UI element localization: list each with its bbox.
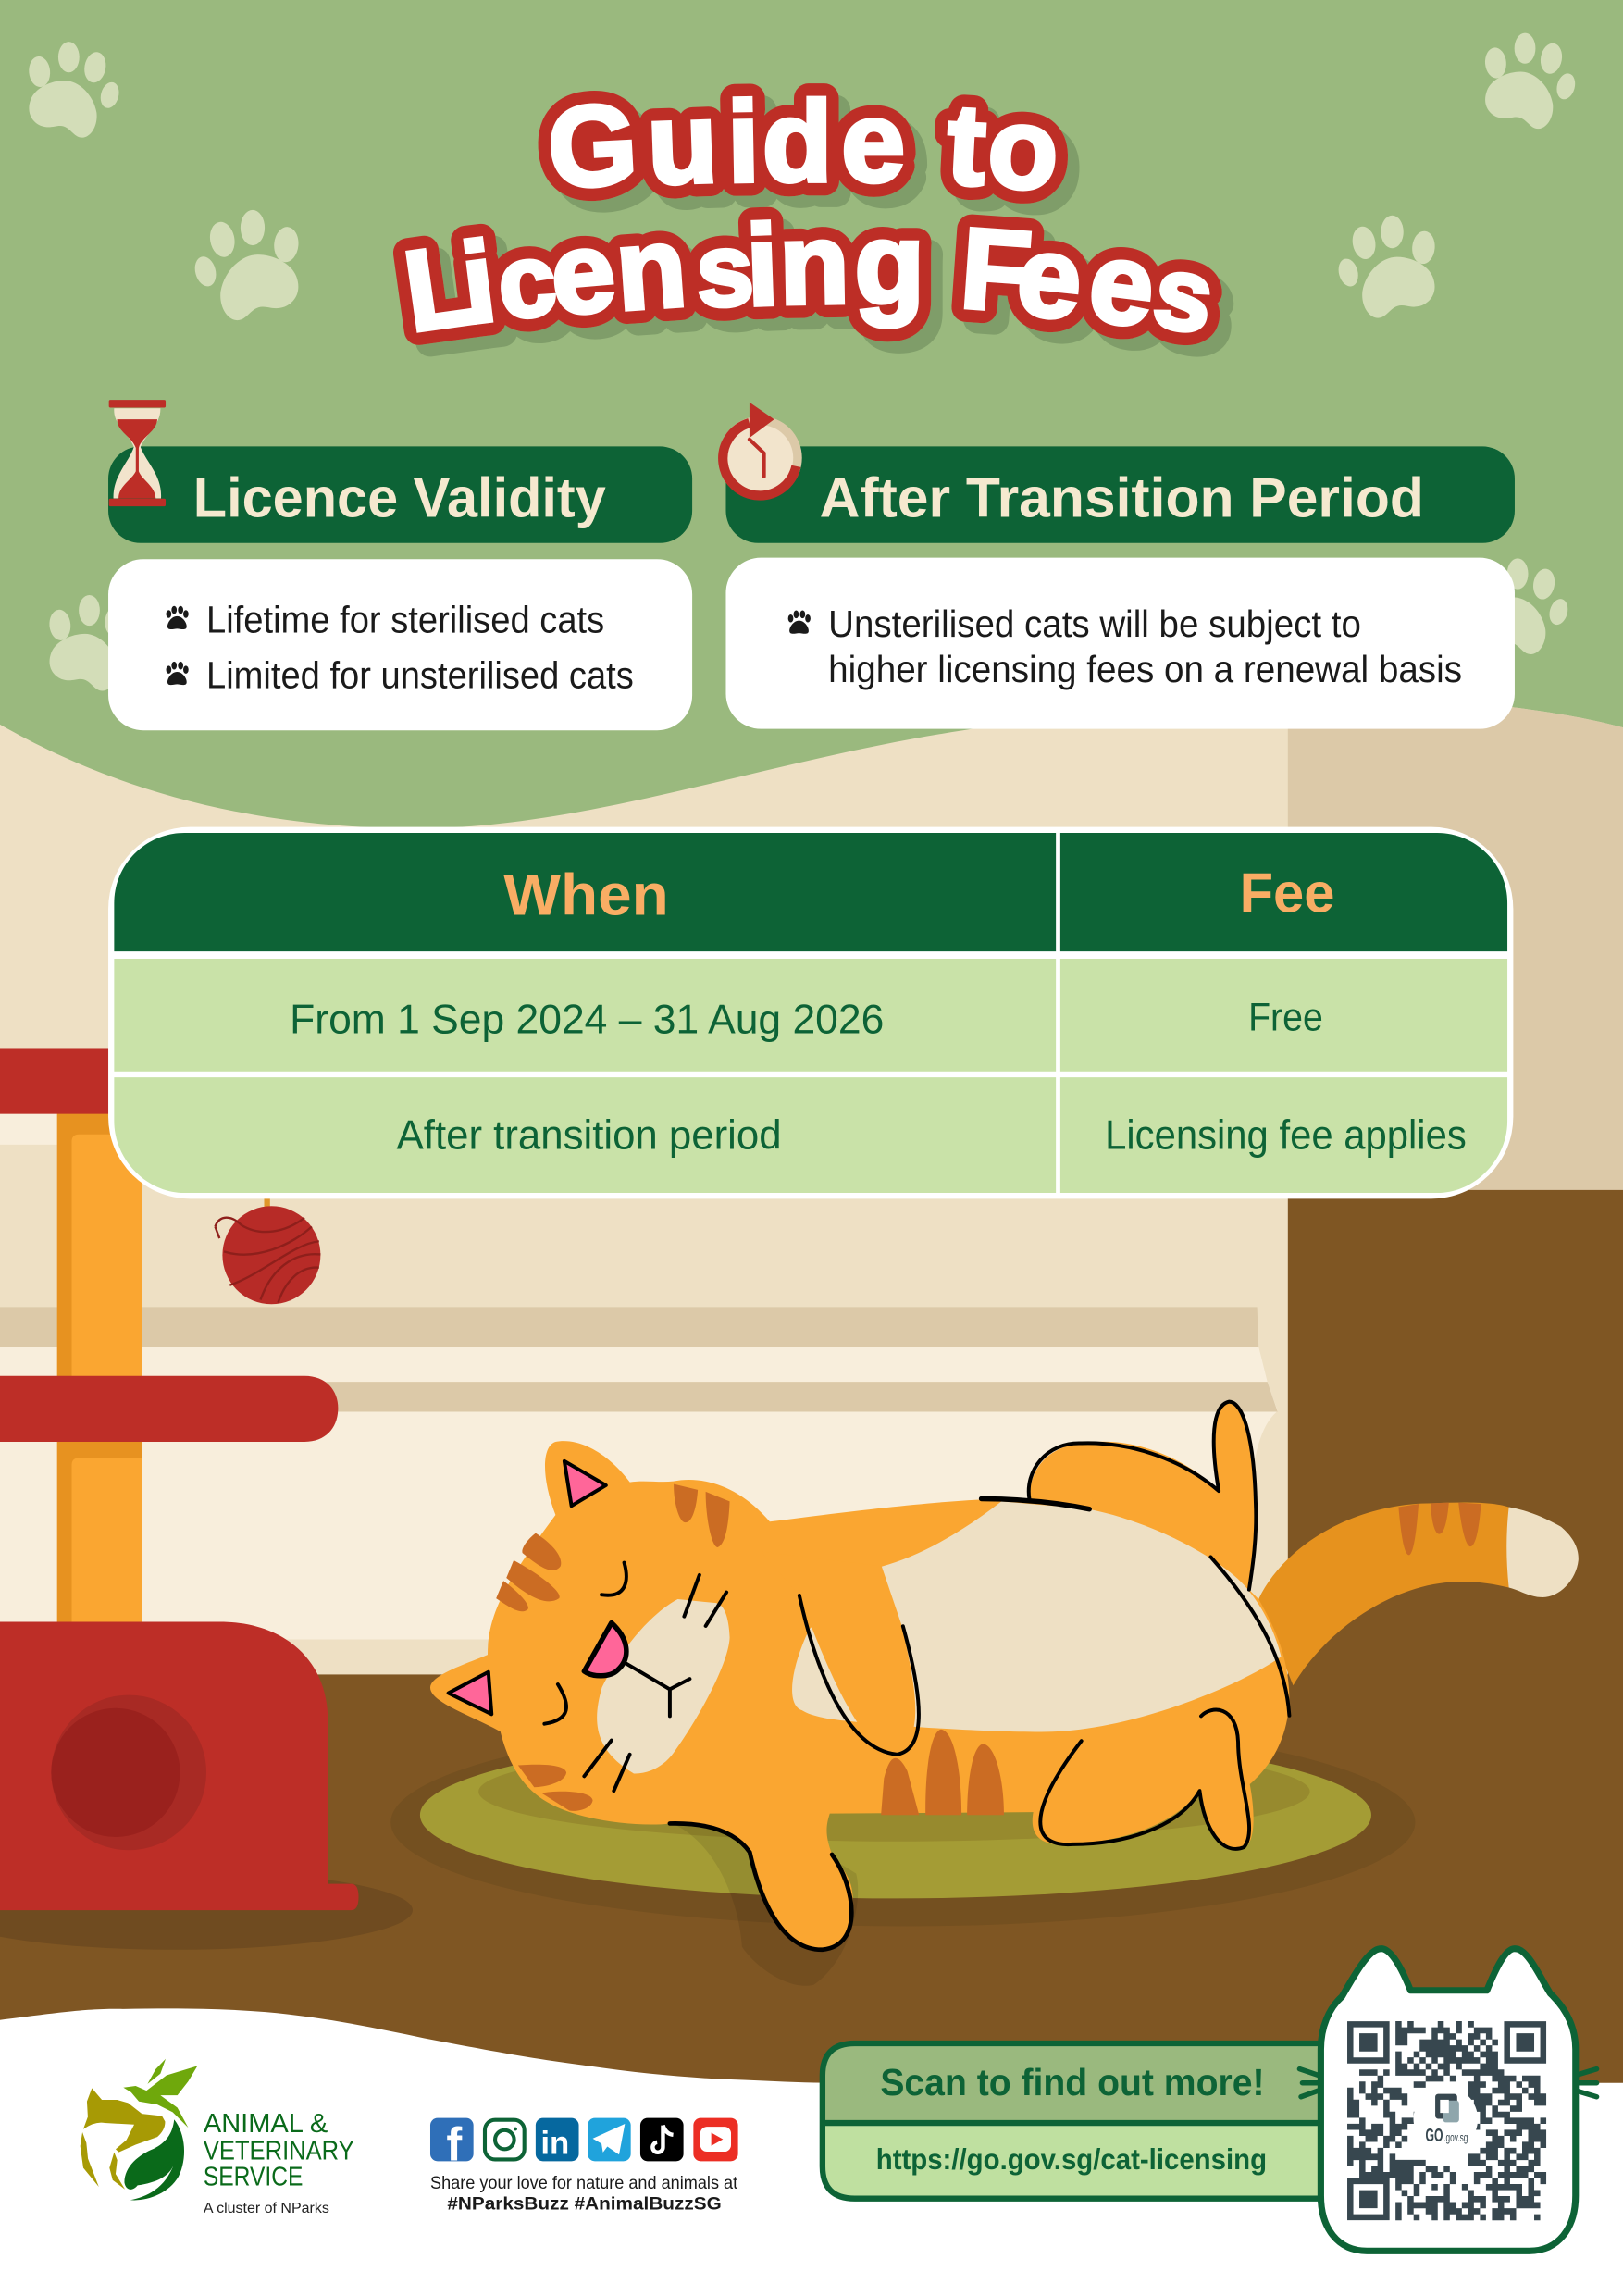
- panel outline: [823, 2043, 1339, 2199]
- yarn ball: [215, 1198, 320, 1304]
- icon: linkedin: in: [540, 2126, 569, 2161]
- QR centre logo: .gov.sg: [1443, 2131, 1468, 2144]
- panel: licence validity header: Licence Validity: [193, 466, 606, 528]
- title white letters: [397, 78, 1220, 356]
- icon: linkedin: [536, 2118, 579, 2161]
- social share text: #NParksBuzz #AnimalBuzzSG: [447, 2194, 722, 2215]
- panel: after transition period text: [725, 558, 1515, 729]
- title: Guide to Licensing Fees: [397, 78, 1220, 356]
- logo: Animal and Veterinary Service: [81, 2059, 354, 2216]
- logo mark: [81, 2059, 197, 2200]
- paw print behind right panel: [1477, 558, 1570, 654]
- panel: after transition period header: After Transition Period: [820, 466, 1424, 528]
- table header: [114, 833, 1507, 951]
- cat whiskers on QR: [1299, 2069, 1597, 2097]
- cat nose: [584, 1623, 626, 1676]
- muzzle: [597, 1599, 730, 1774]
- logo text: ANIMAL &: [204, 2109, 328, 2139]
- table row: after transition: After transition period: [397, 1113, 782, 1159]
- list item: sterilised: Lifetime for sterilised cats: [206, 598, 604, 640]
- logo text: VETERINARY: [204, 2136, 354, 2166]
- QR centre logo: [1414, 2087, 1478, 2152]
- title white letters: Guide to: [545, 78, 1061, 215]
- icon: tiktok: [640, 2118, 684, 2161]
- social share text: Share your love for nature and animals at: [430, 2173, 738, 2193]
- scan heading box: [823, 2043, 1339, 2123]
- QR modules: [1347, 2024, 1546, 2217]
- cat-shaped QR card: [1320, 1949, 1576, 2251]
- title outline layer: Guide to: [545, 78, 1061, 215]
- cat body: [430, 1401, 1289, 1950]
- QR centre logo: GO: [1425, 2125, 1443, 2146]
- cat tail: [1258, 1502, 1579, 1685]
- social share text: [430, 2173, 738, 2215]
- icon: hourglass: [109, 400, 166, 506]
- icon: youtube: [693, 2118, 738, 2161]
- head stripes: [496, 1484, 730, 1811]
- paw bullet: [167, 606, 189, 629]
- paw print upper left: [192, 210, 300, 320]
- paw bullet: [788, 611, 811, 634]
- cat scratching post: [0, 1048, 413, 1950]
- paw print top left: [28, 42, 121, 138]
- table row: transition dates: Free: [1248, 995, 1323, 1039]
- title outline layer: Licensing Fees: [397, 200, 1220, 356]
- social media icons: [430, 2118, 738, 2171]
- icon: facebook: [430, 2118, 474, 2171]
- room scene background: [0, 707, 1623, 2083]
- scan heading: Scan to find out more!: [880, 2061, 1265, 2104]
- title outline layer: [397, 78, 1220, 356]
- logo tagline: A cluster of NParks: [204, 2201, 329, 2216]
- table row: transition dates: From 1 Sep 2024 – 31 Aug 2026: [290, 998, 884, 1043]
- cat ears inner: [449, 1461, 606, 1714]
- fee table: [108, 827, 1513, 1198]
- title white letters: Licensing Fees: [397, 200, 1220, 356]
- panel: licence validity list: [108, 559, 692, 730]
- cat arm: [761, 1552, 915, 1755]
- url box: [823, 2123, 1339, 2199]
- sleeping orange cat: [430, 1401, 1579, 1950]
- paw print top right: [1484, 33, 1578, 129]
- text line one: Unsterilised cats will be subject to: [828, 602, 1361, 645]
- text line two: higher licensing fees on a renewal basis: [828, 648, 1462, 690]
- url: https://go.gov.sg/cat-licensing: [876, 2142, 1267, 2176]
- icon: facebook: f: [446, 2118, 462, 2171]
- footer white wave: [0, 2008, 1623, 2296]
- paw print upper right: [1335, 216, 1436, 318]
- table header: When: [503, 863, 669, 928]
- table row: transition dates: [114, 959, 1507, 1072]
- table row: after transition: Licensing fee applies: [1105, 1113, 1467, 1159]
- cat belly: [792, 1501, 1282, 1731]
- rug under the cat: [390, 1719, 1415, 1986]
- panel: scan to find out more: [823, 2043, 1339, 2199]
- cat outlines and face lines: [544, 1402, 1289, 1950]
- icon: clock with arrow: [719, 403, 802, 500]
- panel: licence validity header: [108, 446, 692, 543]
- icon: instagram: [485, 2120, 525, 2159]
- panel: after transition period header: [725, 446, 1515, 543]
- QR finder patterns: [1347, 2021, 1546, 2220]
- paw print behind left panel: [48, 595, 142, 691]
- table header: Fee: [1240, 862, 1334, 924]
- table row: after transition: [114, 1077, 1507, 1193]
- belly stripes: [881, 1730, 1004, 1815]
- paw bullet: [167, 662, 189, 685]
- icon: telegram: [588, 2118, 631, 2161]
- list item: unsterilised: Limited for unsterilised cats: [206, 653, 634, 696]
- logo text: SERVICE: [204, 2163, 303, 2192]
- QR code: [1347, 2021, 1546, 2220]
- logo text: [204, 2109, 354, 2192]
